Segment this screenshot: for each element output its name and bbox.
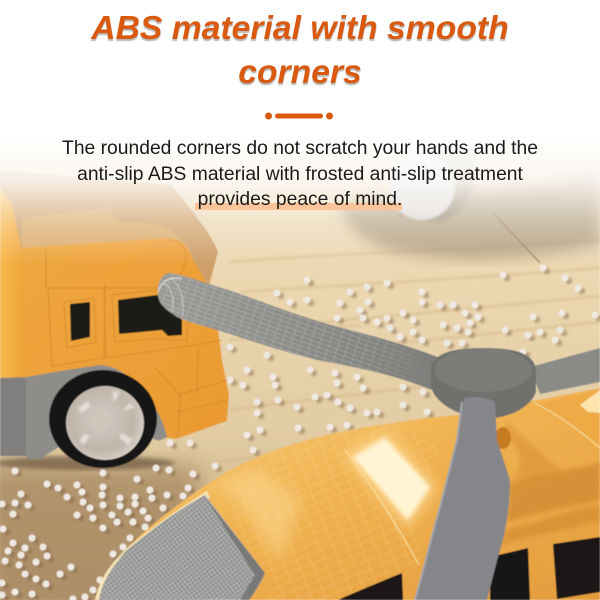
glare <box>353 438 430 520</box>
floor shade lower left <box>0 465 200 600</box>
top-right glare <box>580 390 600 413</box>
rotor hub <box>431 348 536 418</box>
plastic pellets <box>2 268 599 600</box>
pellets <box>2 268 595 599</box>
helicopter windows <box>338 573 403 600</box>
truck wheel <box>49 370 157 468</box>
floor planks <box>0 240 600 530</box>
truck cab body <box>20 238 229 439</box>
truck side window <box>70 302 90 341</box>
title: corners <box>238 53 362 91</box>
roof panel <box>533 390 600 445</box>
body mesh <box>210 422 440 600</box>
cream windshield edge <box>95 491 210 600</box>
body seam <box>345 450 419 565</box>
pellet shadows <box>6 271 599 600</box>
truck roof <box>0 170 218 300</box>
title <box>90 9 509 91</box>
body text: The rounded corners do not scratch your hands and the <box>62 138 538 159</box>
truck grey chassis <box>0 365 167 459</box>
body text <box>62 138 538 210</box>
body text: provides peace of mind. <box>198 189 402 210</box>
text highlight <box>195 203 402 210</box>
title: ABS material with smooth <box>91 9 509 47</box>
lower rotor blade <box>415 397 510 600</box>
windshield mesh <box>98 494 266 600</box>
blurred background shadow <box>340 170 600 258</box>
glare glow <box>345 432 436 528</box>
cargo box <box>0 186 26 378</box>
blurred rear wheel <box>389 150 477 222</box>
helicopter body <box>90 388 600 600</box>
white top fade <box>0 0 600 265</box>
toy truck <box>0 170 229 468</box>
long rotor blade with mesh <box>158 273 440 390</box>
body text: anti-slip ABS material with frosted anti-slip treatment <box>77 164 523 185</box>
right rotor blade <box>530 348 600 394</box>
body ridge shadows <box>507 462 600 522</box>
hub top <box>434 348 532 392</box>
truck front window <box>118 295 182 336</box>
shadow under truck <box>0 456 175 470</box>
rotor <box>158 273 600 600</box>
cab panel lines <box>46 240 228 438</box>
divider <box>265 112 333 120</box>
bronze pin <box>495 427 511 449</box>
